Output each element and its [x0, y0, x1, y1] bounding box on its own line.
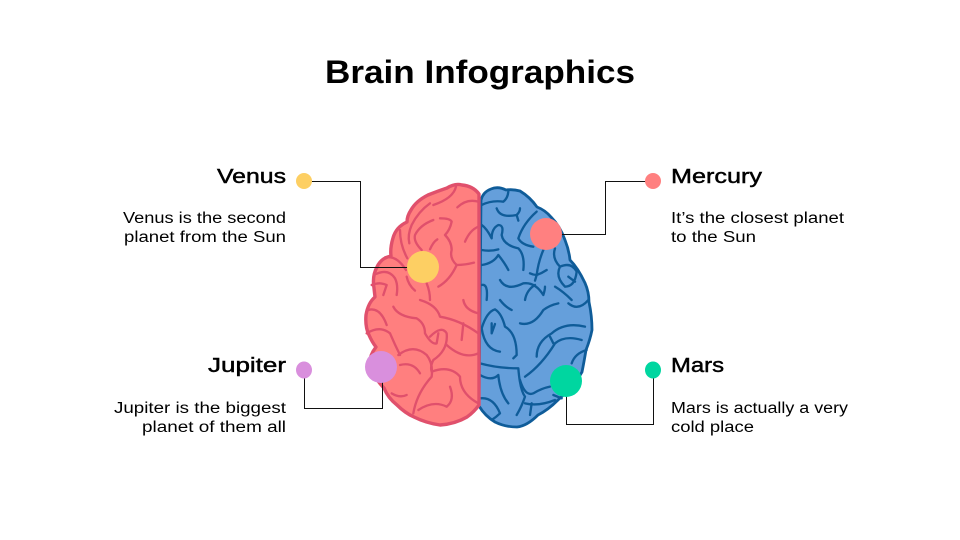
description: Mercury	[671, 210, 845, 246]
text block: Mercury	[671, 166, 845, 246]
connector: Venus	[304, 182, 423, 268]
connector: Jupiter	[304, 367, 382, 408]
description: Venus	[123, 210, 286, 246]
marker: Venus large dot	[407, 251, 439, 283]
marker: Mars large dot	[550, 365, 582, 397]
heading: Venus: Venus	[217, 166, 286, 188]
description: Jupiter: Jupiter is the biggest	[114, 400, 287, 417]
description: Jupiter: planet of them all	[142, 419, 286, 436]
heading: Jupiter: Jupiter	[208, 355, 286, 377]
title: Brain Infographics	[325, 54, 635, 90]
description: Jupiter	[114, 400, 287, 436]
description: Venus: planet from the Sun	[124, 229, 286, 246]
left lower folds	[367, 300, 478, 413]
description: Mars	[671, 400, 848, 436]
description: Mercury: It’s the closest planet	[671, 210, 845, 227]
connector: Mercury	[546, 182, 653, 234]
right lower folds	[480, 300, 588, 420]
left upper folds	[372, 187, 478, 300]
heading: Mars: Mars	[671, 355, 724, 377]
text block: Jupiter	[114, 355, 287, 436]
text block: Mars	[671, 355, 848, 436]
connector: Mars	[566, 370, 654, 424]
right upper folds	[482, 192, 577, 300]
brain illustration	[366, 184, 592, 427]
right hemisphere outline	[479, 188, 592, 427]
description: Venus: Venus is the second	[123, 210, 286, 227]
marker: Jupiter large dot	[365, 351, 397, 383]
marker: Venus small dot	[296, 173, 312, 189]
description: Mercury: to the Sun	[671, 229, 756, 246]
right hemisphere (blue)	[479, 188, 592, 427]
heading: Mercury: Mercury	[671, 166, 762, 188]
marker: Jupiter small dot	[296, 362, 312, 378]
marker: Mars small dot	[645, 362, 661, 378]
description: Mars: cold place	[671, 419, 754, 436]
description: Mars: Mars is actually a very	[671, 400, 848, 417]
text block: Venus	[123, 166, 286, 246]
left hemisphere outline	[366, 184, 479, 425]
marker: Mercury small dot	[645, 173, 661, 189]
marker: Mercury large dot	[530, 218, 562, 250]
left hemisphere (red)	[366, 184, 479, 425]
